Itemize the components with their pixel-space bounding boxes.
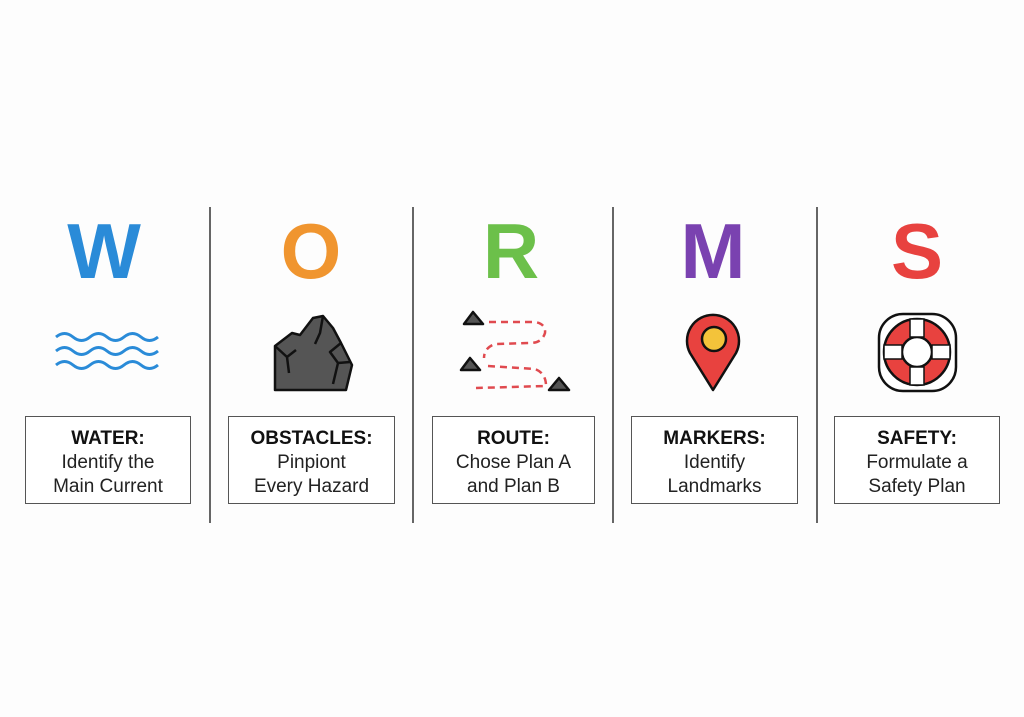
box: route: ROUTE: <box>477 428 550 449</box>
letter R: R <box>483 207 539 295</box>
box: markers <box>631 416 798 504</box>
box: water: Main Current <box>53 476 163 497</box>
box: water <box>25 416 191 504</box>
box: safety: SAFETY: <box>877 428 957 449</box>
box: route <box>432 416 595 504</box>
box: safety: Safety Plan <box>868 476 966 497</box>
box: safety: Formulate a <box>866 452 968 473</box>
box: markers: MARKERS: <box>663 428 766 449</box>
letter O: O <box>281 207 341 295</box>
box: markers: Landmarks <box>668 476 762 497</box>
box: water: WATER: <box>71 428 145 449</box>
letter M: M <box>680 207 745 295</box>
box: obstacles: Every Hazard <box>254 476 369 497</box>
box: route: and Plan B <box>467 476 560 497</box>
box: markers: Identify <box>684 452 745 473</box>
box: route: Chose Plan A <box>456 452 571 473</box>
box: obstacles <box>228 416 395 504</box>
box: obstacles: OBSTACLES: <box>250 428 373 449</box>
letter W: W <box>67 207 141 295</box>
box: safety <box>834 416 1000 504</box>
letter S: S <box>891 207 943 295</box>
box: water: Identify the <box>62 452 154 473</box>
box: obstacles: Pinpiont <box>277 452 346 473</box>
